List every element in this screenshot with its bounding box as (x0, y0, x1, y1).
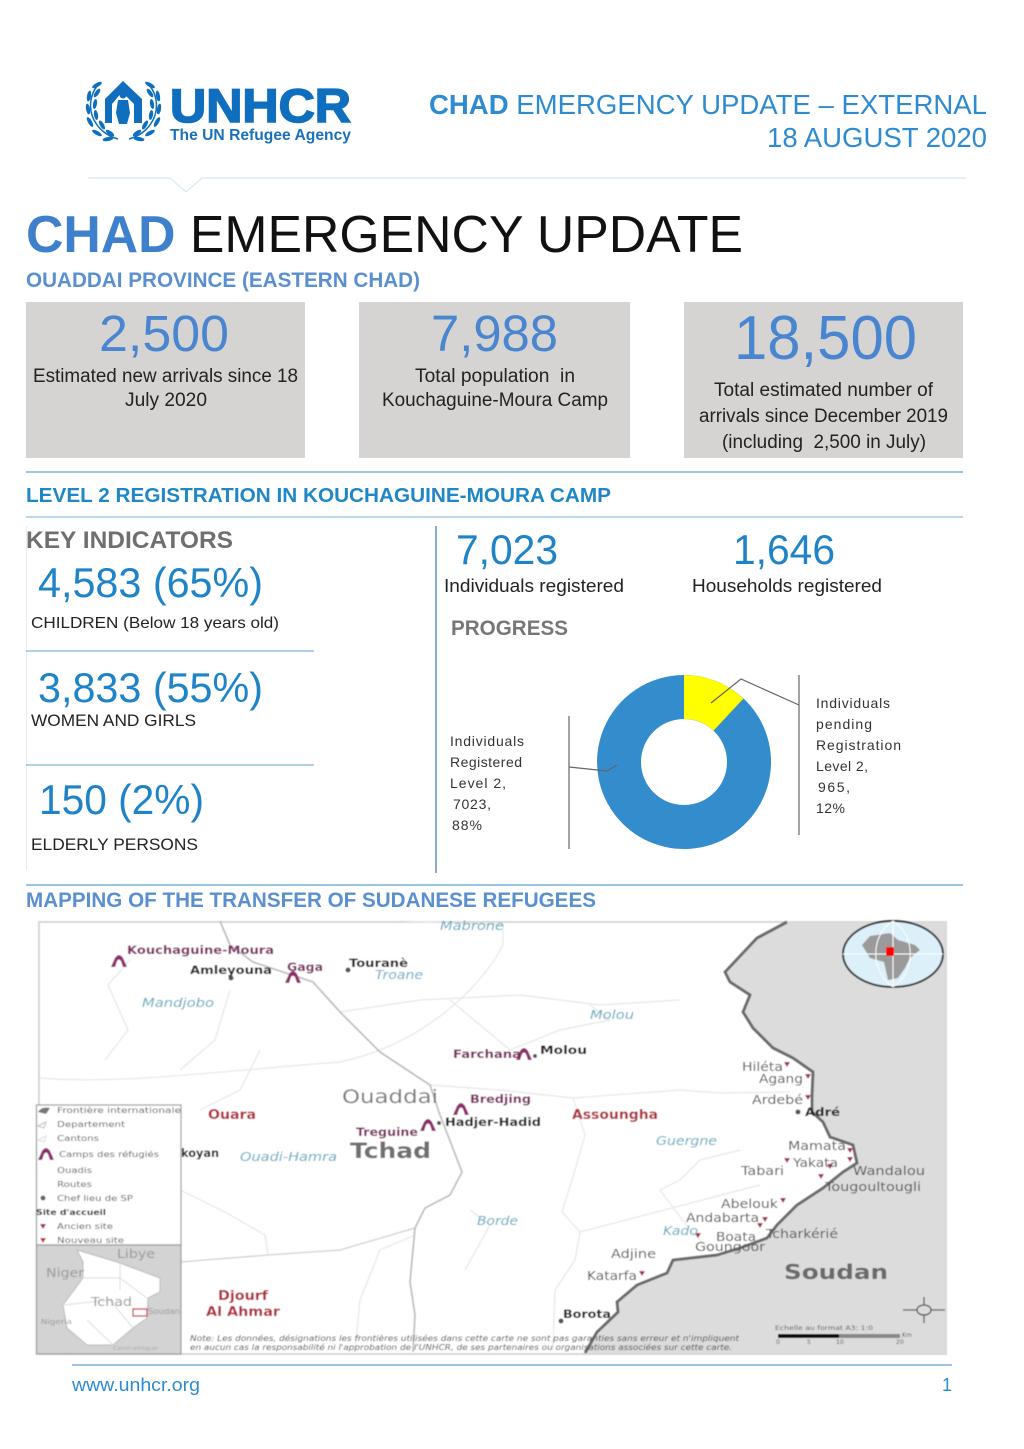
map labels: Andabarta (686, 1211, 759, 1225)
map labels: Yakata (792, 1156, 838, 1170)
label: registered: Individuals (450, 733, 524, 749)
map labels: Treguine (356, 1125, 418, 1139)
map labels: Agang (759, 1072, 803, 1086)
scale bar: 10 (836, 1339, 844, 1346)
donut chart: registration progress (450, 675, 901, 849)
legend: Site d'accueil (36, 1208, 106, 1217)
map labels: Farchana (453, 1047, 521, 1061)
label: pending: pending (816, 716, 872, 732)
map labels (127, 919, 925, 1321)
department boundary (220, 921, 462, 1352)
label: pending: Individuals (816, 695, 890, 711)
panel: new arrivals: July 2020 (125, 390, 207, 411)
scale bar: 0 (776, 1339, 780, 1346)
label: registered (450, 733, 524, 833)
legend: Camps des réfugiés (59, 1149, 159, 1159)
legend: Frontière internationale (57, 1105, 181, 1115)
map labels: Bredjing (470, 1092, 531, 1106)
indicator: elderly persons: ELDERLY PERSONS (31, 835, 198, 854)
scale bar (775, 1325, 912, 1346)
light wadis and roads (40, 921, 790, 1350)
inset map: Chad location: Tchad (90, 1295, 132, 1309)
map labels: Adjine (611, 1247, 656, 1261)
map note: Note: Les données, désignations les frontières utilisées dans cette carte ne sont pas garanties sans erreur et n'impliquent (190, 1333, 740, 1343)
logo: UNHCR (85, 79, 351, 144)
map labels: Goungoor (695, 1240, 765, 1254)
panel: camp population: Total population in (415, 366, 575, 387)
label: registered: 88% (452, 817, 482, 833)
map labels: Mandjobo (142, 996, 214, 1010)
label: pending: 965, (818, 779, 850, 795)
map labels: Molou (540, 1043, 587, 1057)
scale bar: 5 (807, 1339, 811, 1346)
icon: UNHCR emblem (85, 81, 162, 142)
panel: total arrivals: 18,500 (734, 304, 917, 373)
map labels: Tchad (350, 1139, 431, 1163)
map note: en aucun cas la responsabilité ni l'approbation de l'UNHCR, de ses partenaires ou organisations associées sur cette carte. (190, 1342, 732, 1352)
inset map: Chad location: Niger (46, 1266, 84, 1280)
panel: new arrivals: Estimated new arrivals since 18 (33, 366, 298, 387)
stat: individuals registered: 7,023 (456, 526, 558, 573)
refugee camp icons (111, 955, 532, 1131)
inset map: Chad location: Centrafrique (113, 1346, 159, 1352)
indicator: children: CHILDREN (Below 18 years old) (31, 615, 279, 632)
map labels: Hadjer-Hadid (445, 1115, 541, 1129)
Sudan territory (585, 922, 946, 1353)
stat: households registered: 1,646 (733, 526, 835, 573)
map labels: Wandalou (853, 1164, 925, 1178)
indicator: elderly persons: 150 (2%) (39, 776, 204, 823)
inset map: Chad location: Soudan (148, 1307, 180, 1316)
logo: UNHCR: UNHCR (170, 79, 351, 132)
panel: new arrivals: 2,500 (99, 305, 229, 362)
legend: Cantons (57, 1134, 99, 1143)
label: registered: Registered (450, 754, 522, 770)
panel: camp population: Kouchaguine-Moura Camp (382, 390, 608, 411)
stat: individuals registered: Individuals registered (444, 576, 624, 596)
map labels: Tcharkérié (765, 1227, 838, 1241)
heading: progress: PROGRESS (451, 617, 568, 640)
logo: UNHCR: The UN Refugee Agency (170, 127, 351, 144)
map labels: Borota (563, 1307, 611, 1321)
scale bar: Echelle au format A3: 1:0 (775, 1325, 873, 1332)
indicator: women and girls (31, 664, 263, 730)
heading: mapping: MAPPING OF THE TRANSFER OF SUDANESE REFUGEES (26, 889, 596, 912)
panel: key indicators (26, 526, 314, 870)
label: registered: 7023, (453, 796, 491, 812)
legend: Departement (57, 1120, 125, 1129)
map labels: Ouara (208, 1108, 256, 1123)
map labels: Ouaddai (342, 1086, 438, 1108)
map labels: Al Ahmar (206, 1305, 281, 1320)
panel: total arrivals (684, 302, 963, 458)
legend: Chef lieu de SP (57, 1194, 133, 1203)
indicator: elderly persons (31, 776, 204, 854)
inset map: Chad location: Nigeria (41, 1318, 72, 1326)
map labels: Guergne (656, 1134, 717, 1148)
scale bar: Km (902, 1332, 912, 1339)
heading: key indicators: KEY INDICATORS (26, 527, 233, 554)
map labels: Djourf (218, 1289, 268, 1304)
map labels: koyan (181, 1146, 219, 1160)
label: pending: Level 2, (816, 758, 868, 774)
legend (36, 1105, 181, 1245)
stat: households registered: Households registered (692, 576, 882, 596)
inset map: Chad location (36, 1245, 181, 1354)
legend: Ouadis (57, 1166, 92, 1175)
header: report title and date: 18 AUGUST 2020 (767, 122, 987, 153)
map labels: Soudan (784, 1260, 888, 1284)
compass rose (903, 1297, 945, 1323)
subtitle: province: OUADDAI PROVINCE (EASTERN CHAD) (26, 269, 420, 292)
map labels: Borde (477, 1214, 518, 1228)
map labels: Touranè (349, 956, 408, 970)
stat: individuals registered (444, 526, 624, 596)
map labels: Ouadi-Hamra (240, 1150, 337, 1164)
map labels: Mabrone (440, 919, 504, 933)
map labels: Katarfa (587, 1269, 637, 1283)
footer: website: www.unhcr.org (71, 1375, 200, 1395)
map labels: Kado (663, 1224, 698, 1238)
header: report title and date: CHAD EMERGENCY UPDATE – EXTERNAL (429, 89, 987, 120)
panel: total arrivals: arrivals since December 2019 (699, 406, 948, 427)
panel: camp population: 7,988 (431, 305, 558, 362)
map labels: Ardebé (752, 1093, 803, 1107)
panel: total arrivals: (including 2,500 in July) (722, 432, 926, 453)
map labels: Mamata (788, 1139, 846, 1153)
indicator: women and girls: 3,833 (55%) (38, 664, 263, 711)
label: pending: Registration (816, 737, 901, 753)
map labels: Amleyouna (190, 963, 272, 977)
panel: new arrivals (26, 302, 305, 458)
legend: Ancien site (57, 1222, 113, 1231)
legend: Routes (57, 1180, 92, 1189)
indicator: children: 4,583 (65%) (38, 559, 263, 606)
map labels: Troane (375, 968, 423, 982)
map labels: Boata (716, 1230, 756, 1244)
footer: page number: 1 (942, 1375, 952, 1395)
map labels: Tougoultougli (824, 1180, 921, 1194)
heading: level 2 registration: LEVEL 2 REGISTRATION IN KOUCHAGUINE-MOURA CAMP (26, 485, 611, 507)
site markers (228, 968, 853, 1324)
inset map: Chad location: Libye (117, 1247, 155, 1261)
map labels: Hiléta (742, 1060, 783, 1074)
stat: households registered (692, 526, 882, 596)
scale bar: 20 (896, 1339, 904, 1346)
map: transfer of Sudanese refugees (36, 919, 946, 1354)
label: pending: 12% (816, 800, 845, 816)
map labels: Molou (590, 1008, 634, 1022)
map labels: Assoungha (572, 1108, 658, 1123)
indicator: children (31, 559, 279, 632)
legend: Nouveau site (57, 1236, 124, 1245)
indicator: women and girls: WOMEN AND GIRLS (31, 711, 196, 730)
map labels: Gaga (287, 960, 323, 974)
panel: camp population (359, 302, 630, 458)
globe locator (843, 921, 943, 987)
panel: total arrivals: Total estimated number of (714, 380, 934, 401)
label: pending (816, 695, 901, 816)
label: registered: Level 2, (450, 775, 506, 791)
title: CHAD EMERGENCY UPDATE (26, 206, 743, 264)
map labels: Kouchaguine-Moura (127, 943, 274, 957)
map note (190, 1333, 740, 1352)
map labels: Abelouk (721, 1197, 778, 1211)
header: report title and date (429, 89, 987, 153)
map labels: Tabari (740, 1164, 784, 1178)
map labels: Adré (805, 1105, 840, 1119)
